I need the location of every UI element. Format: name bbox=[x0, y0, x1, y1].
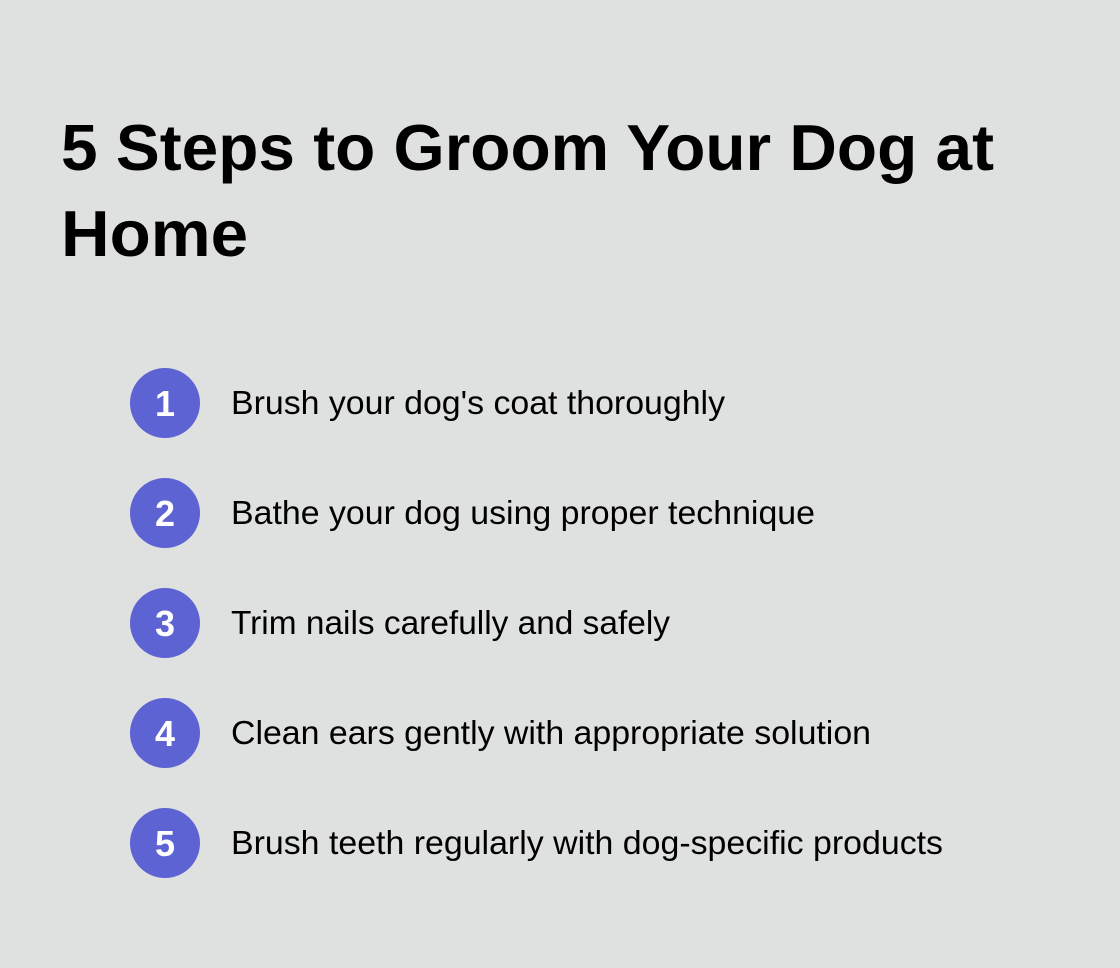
step 4: Clean ears gently with appropriate solution bbox=[231, 714, 871, 751]
step 4 bbox=[130, 698, 871, 768]
step 1 bbox=[130, 368, 726, 438]
step 2: Bathe your dog using proper technique bbox=[231, 494, 815, 531]
title: Home bbox=[61, 197, 248, 270]
step 1: 1 bbox=[155, 383, 175, 424]
step 5 bbox=[130, 808, 943, 878]
title: 5 Steps to Groom Your Dog at bbox=[61, 111, 994, 184]
step 3: Trim nails carefully and safely bbox=[231, 604, 670, 641]
title bbox=[61, 111, 994, 270]
step 5: 5 bbox=[155, 823, 175, 864]
step 2: 2 bbox=[155, 493, 175, 534]
step 1: Brush your dog's coat thoroughly bbox=[231, 384, 726, 421]
step 5: Brush teeth regularly with dog-specific products bbox=[231, 824, 943, 861]
step 2 bbox=[130, 478, 815, 548]
step 3: 3 bbox=[155, 603, 175, 644]
step 4: 4 bbox=[155, 713, 175, 754]
step 3 bbox=[130, 588, 670, 658]
